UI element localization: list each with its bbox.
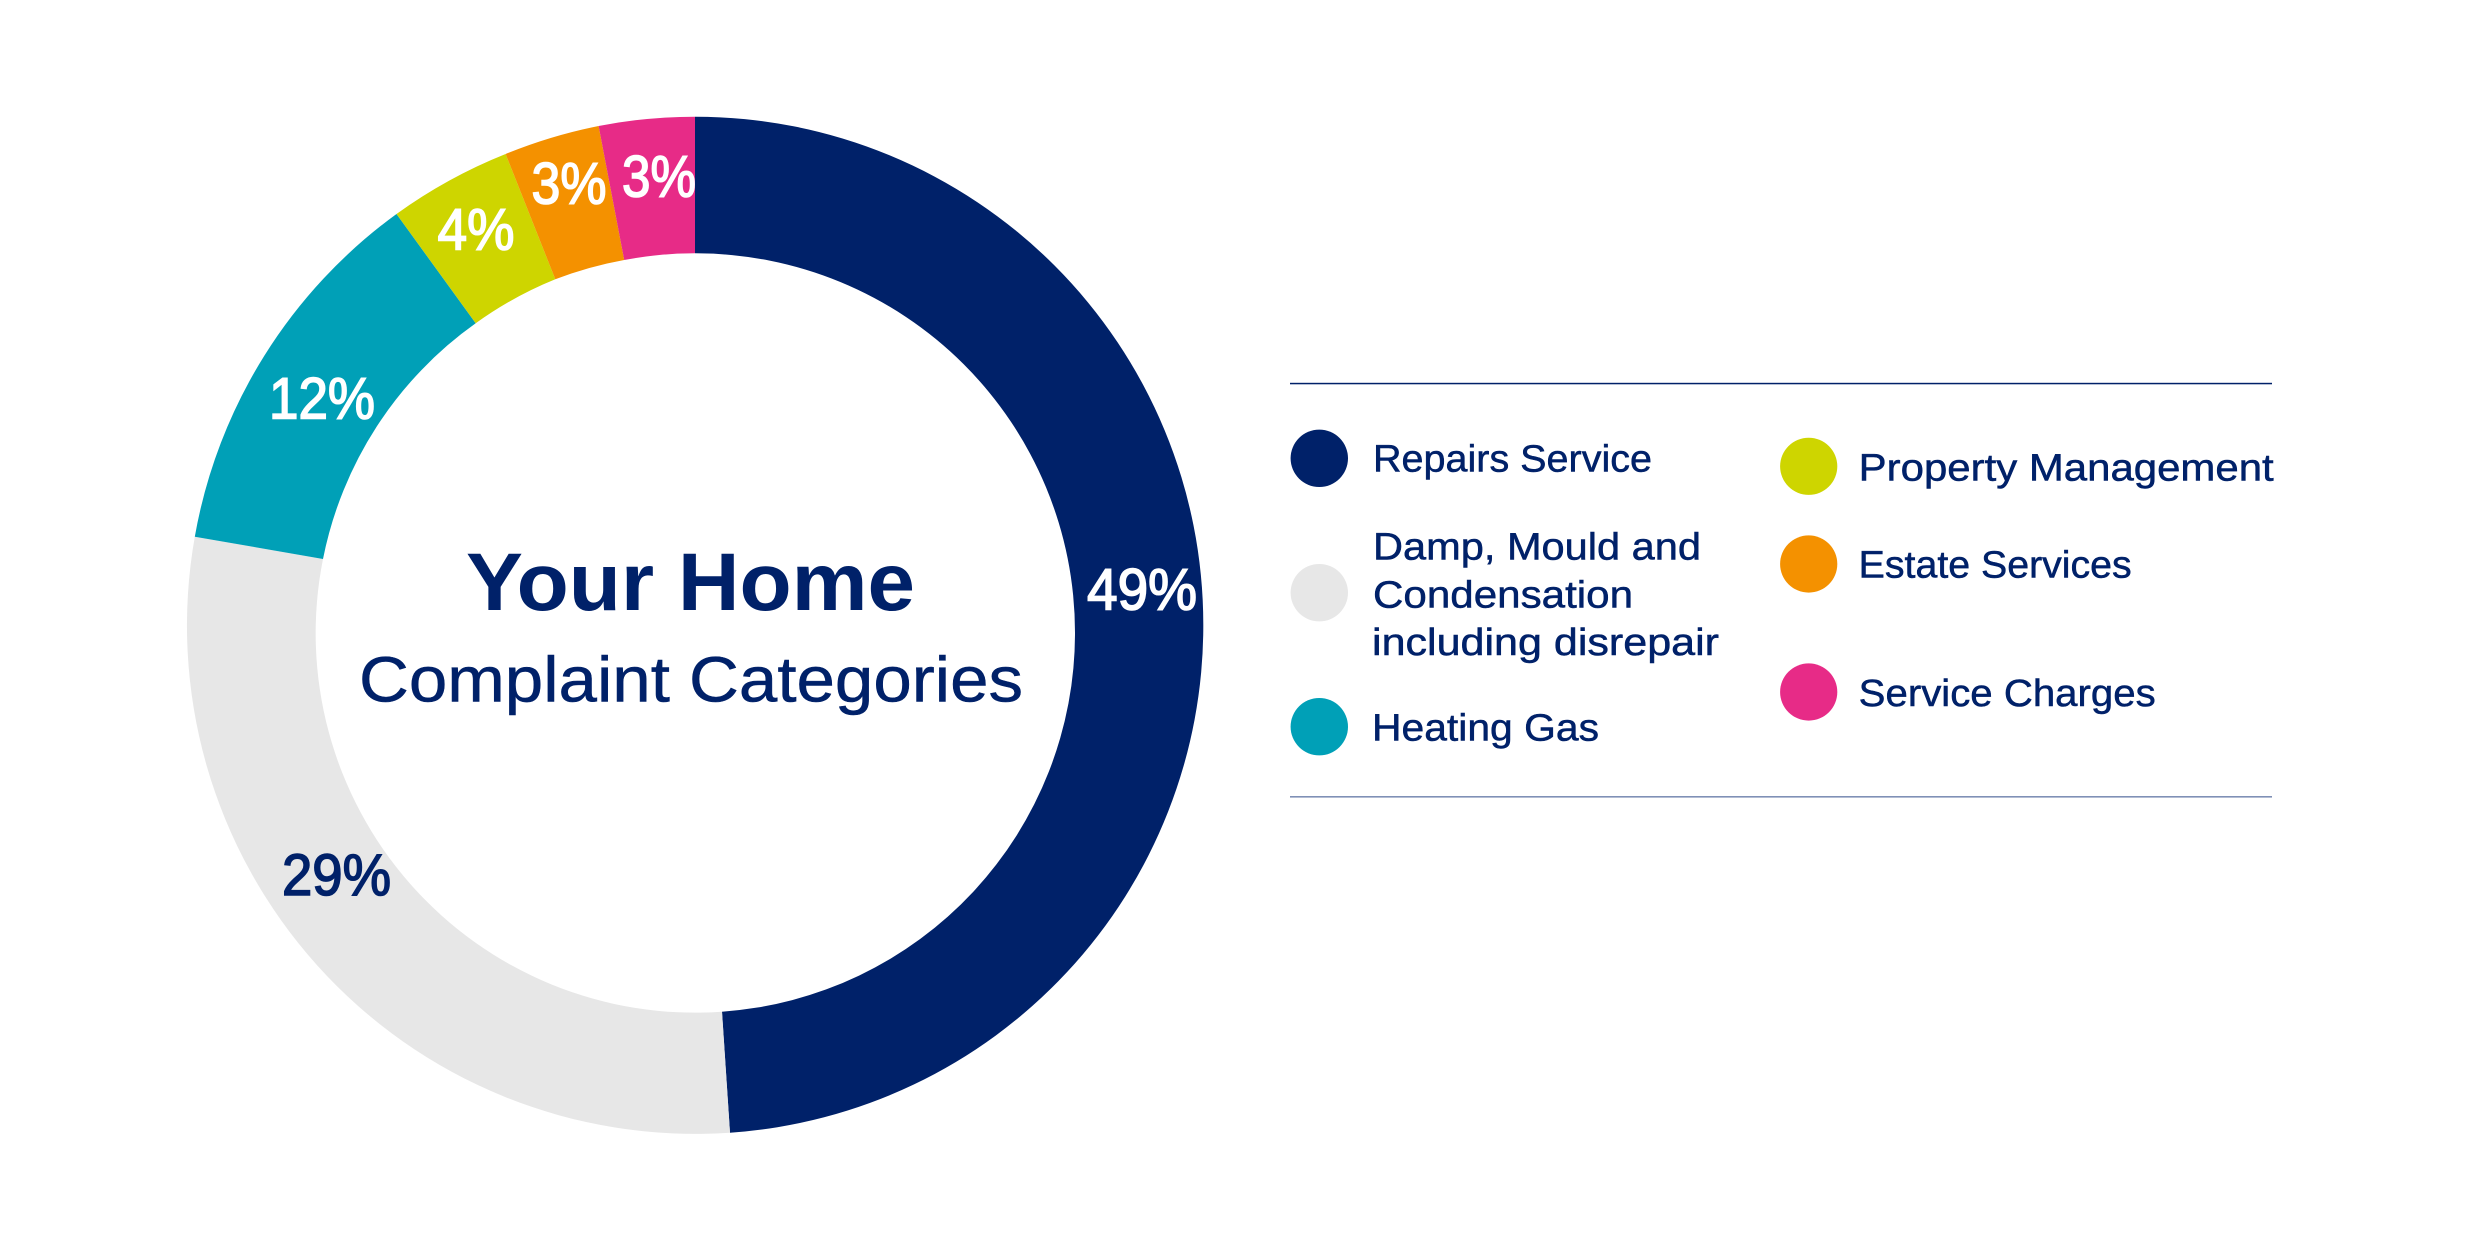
legend item: Heating Gas: [1291, 698, 1599, 755]
segment: Heating Gas 12%: [195, 214, 476, 559]
value: 3% pink: 3%: [622, 145, 696, 210]
segment: Estate Services 3%: [506, 126, 624, 279]
value: 4%: 4%: [438, 197, 514, 262]
legend item: Damp, Mould and Condensation including disrepair: [1291, 526, 1719, 664]
segment: Repairs Service 49%: [695, 117, 1203, 1133]
legend item: Damp, Mould and Condensation including disrepair: Damp, Mould and: [1373, 526, 1701, 568]
legend item: Service Charges: [1780, 663, 2156, 721]
legend top rule: [1290, 383, 2272, 384]
legend item: Property Management: [1780, 438, 2274, 495]
legend item: Damp, Mould and Condensation including disrepair: Condensation: [1373, 574, 1633, 616]
segment: Damp, Mould and Condensation 29%: [187, 537, 730, 1134]
subtitle: Complaint Categories: Complaint Categories: [359, 644, 1023, 716]
donut chart: [187, 117, 1203, 1134]
legend item: Repairs Service: Repairs Service: [1373, 439, 1652, 481]
legend: [1290, 383, 2274, 798]
value: 29%: 29%: [282, 843, 391, 908]
legend item: Estate Services: [1780, 535, 2132, 593]
legend item: Estate Services: Estate Services: [1859, 545, 2132, 587]
legend bottom rule: [1290, 796, 2272, 798]
title: Your Home: Your Home: [466, 537, 915, 628]
value: 3% orange: 3%: [532, 151, 606, 216]
legend item: Repairs Service: [1291, 430, 1652, 487]
segment: Property Management 4%: [396, 154, 555, 323]
legend item: Damp, Mould and Condensation including disrepair: including disrepair: [1372, 622, 1719, 664]
legend item: Property Management: Property Management: [1859, 448, 2274, 490]
segment: Service Charges 3%: [599, 117, 695, 260]
legend item: Heating Gas: Heating Gas: [1372, 708, 1599, 750]
value: 12%: 12%: [269, 366, 375, 431]
legend item: Service Charges: Service Charges: [1859, 673, 2156, 715]
value: 49%: 49%: [1087, 557, 1197, 622]
